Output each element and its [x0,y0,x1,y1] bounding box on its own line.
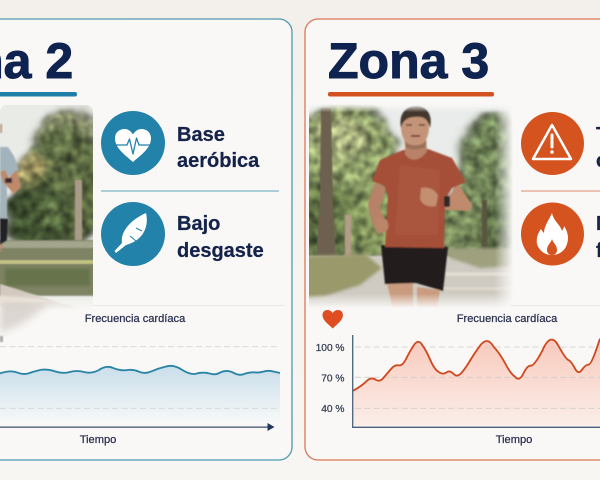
runner figure [368,106,472,310]
chart area and line [0,347,280,422]
heading: Zona 3: Zona 3 [328,33,489,89]
chart: frecuencia cardíaca Zona 3 [316,310,600,446]
chart area and line [353,339,600,427]
text: Base aeróbica: aeróbica [177,150,260,172]
y axis labels: 100 % [316,343,344,354]
panel: Zona 2 [0,19,292,460]
panel frame: Zona 3 [305,19,600,460]
y axis labels: 40 % [321,404,344,415]
divider: Zona 2 benefits [101,190,279,192]
icon: warning triangle [521,112,584,175]
photo fade below runner [0,298,50,334]
icon: flame [521,202,584,266]
shoe fragment below photo [0,336,3,342]
photo: runner in park, Zona 2 [0,105,93,308]
text: Bajo desgaste: desgaste [177,240,264,262]
photo: runner in forest, Zona 3 [309,104,512,307]
chart title: Frecuencia cardíaca [85,313,186,325]
divider: chart top [510,305,600,306]
icon: heart [322,310,343,328]
axes [353,335,600,427]
panel: Zona 3 [289,19,600,460]
y axis labels: 70 % [321,374,344,384]
heading underline: Zona 2 [0,92,77,96]
text: Base aeróbica: Base [177,124,225,146]
divider: chart top [93,305,285,306]
divider: Zona 3 benefits [521,190,600,192]
heading underline: Zona 3 [328,92,494,96]
axis label: Tiempo: Tiempo [496,434,532,446]
panel frame: Zona 2 [0,19,292,460]
time axis with arrow [0,423,274,431]
axis label: Tiempo: Tiempo [80,434,116,446]
text: Bajo desgaste: Bajo [177,213,220,235]
chart title: Frecuencia cardíaca [457,313,558,325]
chart: frecuencia cardíaca Zona 2 [0,313,280,446]
icon: heart with pulse [101,111,165,175]
y axis labels [316,343,344,415]
icon: feather [101,202,165,266]
